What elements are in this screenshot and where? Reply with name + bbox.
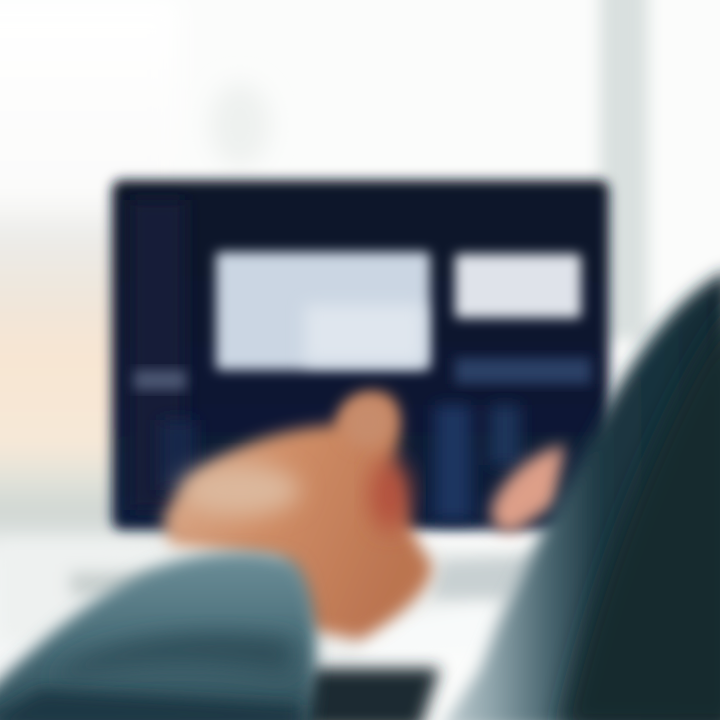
blue bar <box>455 358 591 384</box>
laptop screen <box>112 180 609 530</box>
keyboard and desk <box>0 545 540 660</box>
left sleeve <box>0 552 316 720</box>
fingertip <box>342 396 394 448</box>
lower columns <box>160 405 520 520</box>
right sleeve <box>440 270 720 720</box>
small sidebar label <box>134 370 186 390</box>
dark desk edge <box>290 668 440 720</box>
right fingers <box>491 445 565 533</box>
left sidebar <box>130 200 185 510</box>
main content panel <box>216 252 430 370</box>
dark lower sleeve <box>0 690 300 720</box>
knuckle highlight <box>180 464 300 516</box>
dark sleeve fold <box>50 634 295 685</box>
hand <box>162 393 432 640</box>
shaded palm <box>370 459 410 531</box>
window post <box>600 0 648 340</box>
side content panel <box>455 254 581 318</box>
